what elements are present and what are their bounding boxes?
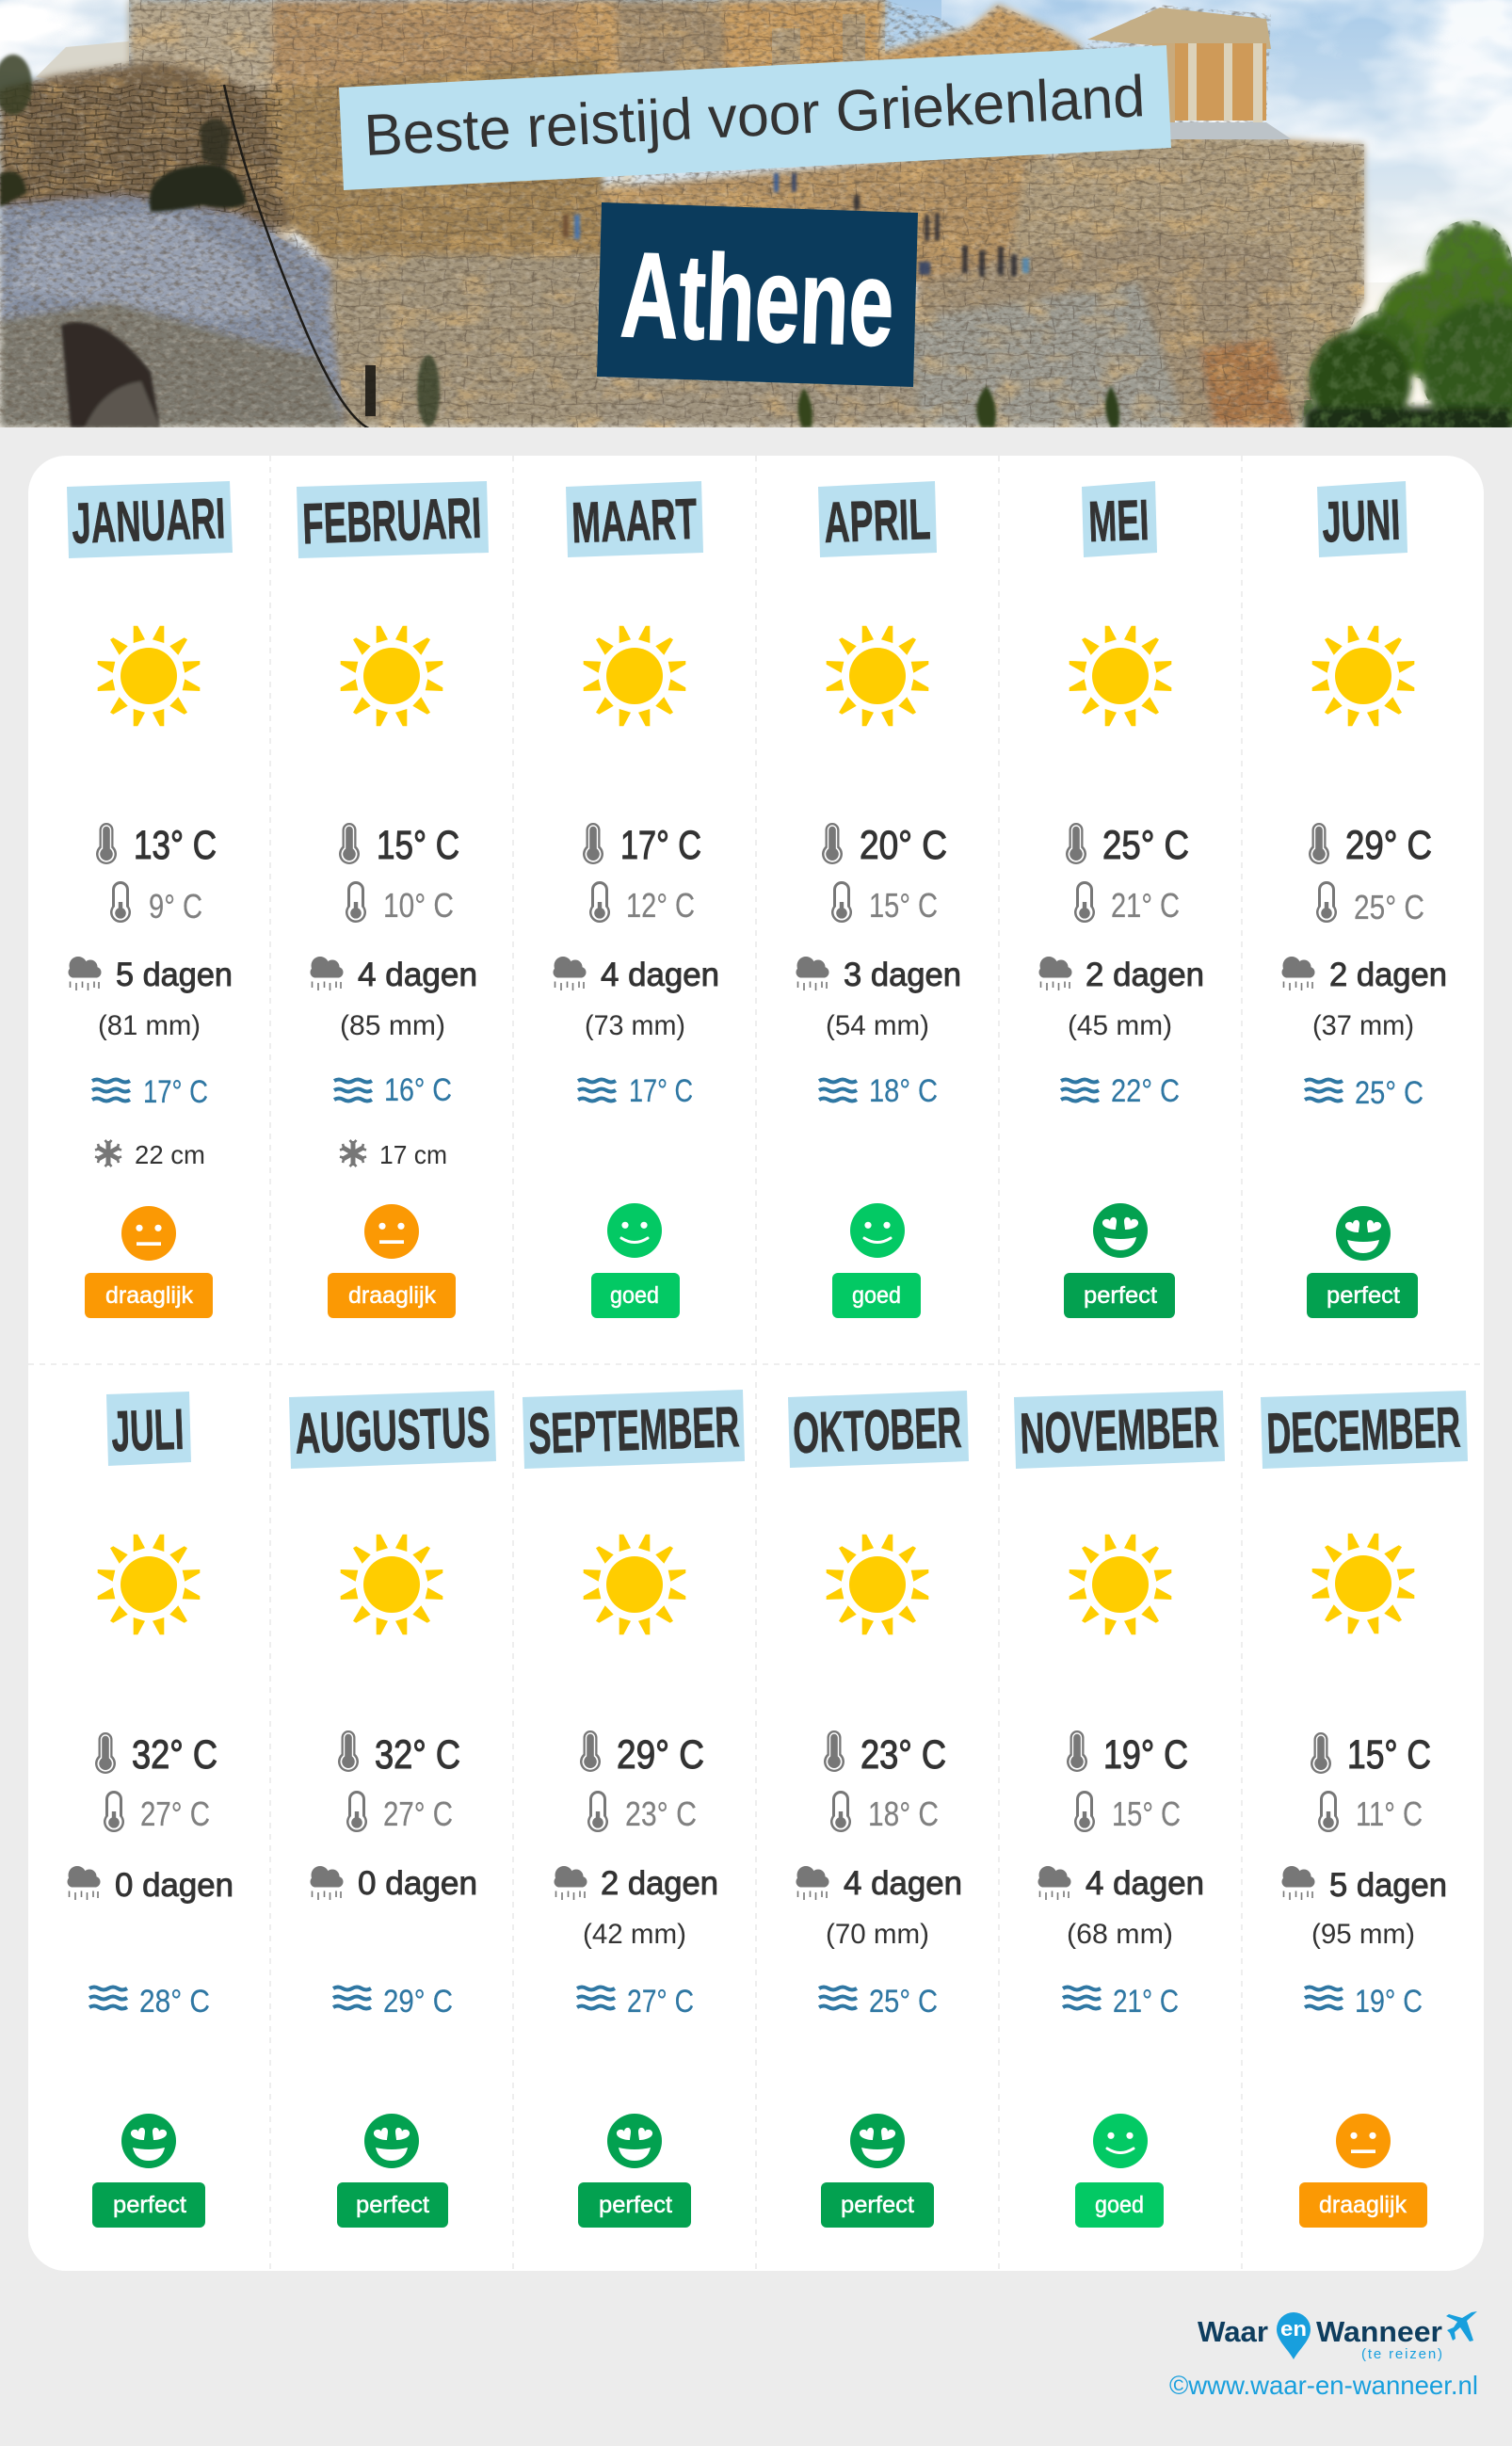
icon: map pin [1277, 2312, 1311, 2359]
rain days: 2 dagen [601, 1865, 718, 1902]
icon: thermometer max [1066, 823, 1086, 864]
month label: MAART [571, 487, 698, 555]
rainfall: (70 mm) [826, 1919, 929, 1950]
icon: happy face [1093, 2114, 1148, 2168]
panel: september [523, 1390, 745, 2228]
min temperature: 11° C [1356, 1794, 1423, 1833]
icon: thermometer min [1074, 1791, 1095, 1832]
logo word: Wanneer: Wanneer [1316, 2315, 1442, 2348]
icon: sea [577, 1987, 615, 2009]
icon: thermometer min [110, 881, 131, 923]
rain days: 5 dagen [116, 957, 233, 993]
rainfall: (68 mm) [1067, 1919, 1173, 1950]
rating badge: perfect [356, 2192, 429, 2218]
rainfall: (95 mm) [1311, 1919, 1415, 1950]
rainfall: (45 mm) [1068, 1010, 1172, 1041]
icon: thermometer min [589, 881, 610, 923]
icon: happy face [607, 1203, 662, 1258]
panel: maart [554, 481, 719, 1318]
max temperature: 29° C [1345, 823, 1432, 868]
icon: snow [340, 1140, 366, 1167]
min temperature: 23° C [625, 1794, 697, 1833]
rating badge: perfect [1084, 1282, 1157, 1309]
icon: sea [92, 1079, 130, 1102]
panel: juli [68, 1392, 233, 2228]
icon: rain [311, 957, 343, 990]
logo tagline: (te reizen) [1361, 2346, 1442, 2362]
min temperature: 25° C [1354, 888, 1424, 926]
panel: mei [1039, 481, 1204, 1318]
icon: airplane [1446, 2311, 1477, 2341]
rating badge [85, 1273, 213, 1318]
min temperature: 27° C [383, 1794, 453, 1833]
icon: neutral face [1336, 2114, 1391, 2168]
icon: happy face [850, 1203, 905, 1258]
icon: rain [1282, 957, 1314, 990]
icon: thermometer max [1311, 1732, 1331, 1774]
max temperature: 32° C [375, 1732, 460, 1778]
icon: thermometer max [339, 823, 360, 864]
month label [289, 1391, 496, 1469]
snow depth: 22 cm [135, 1140, 205, 1169]
icon: thermometer min [587, 1791, 608, 1832]
panel: oktober [788, 1391, 969, 2228]
title text: Athene [619, 227, 896, 372]
icon: sun [584, 626, 685, 726]
icon: sea [819, 1987, 857, 2009]
min temperature: 21° C [1111, 886, 1180, 925]
sea temperature: 29° C [383, 1984, 453, 2020]
panel: april [796, 481, 961, 1318]
rain days: 4 dagen [358, 957, 477, 993]
icon: thermometer max [822, 823, 843, 864]
rain days: 4 dagen [1086, 1865, 1204, 1902]
sea temperature: 17° C [629, 1073, 693, 1109]
sea temperature: 28° C [139, 1984, 210, 2020]
icon: thermometer max [95, 1732, 116, 1774]
icon: sun [827, 626, 928, 726]
rain days: 4 dagen [601, 957, 719, 993]
month label [566, 481, 703, 557]
rating badge [821, 2182, 934, 2228]
panel: februari [297, 481, 489, 1318]
sea temperature: 25° C [1355, 1075, 1424, 1111]
icon: sun [1070, 1535, 1171, 1634]
max temperature: 15° C [377, 823, 459, 868]
rating badge [591, 1273, 680, 1318]
rating badge: perfect [599, 2192, 672, 2218]
icon: thermometer min [830, 1791, 851, 1832]
min temperature: 15° C [1112, 1794, 1181, 1833]
icon: thermometer min [1318, 1791, 1339, 1832]
sea temperature: 19° C [1355, 1984, 1423, 2020]
rain days: 4 dagen [844, 1865, 962, 1902]
rating badge [1064, 1273, 1175, 1318]
month label [297, 481, 489, 558]
rating badge: goed [610, 1282, 659, 1309]
min temperature: 10° C [383, 886, 454, 925]
month label [788, 1391, 969, 1468]
month label: MEI [1087, 488, 1150, 554]
icon: love face [1093, 1203, 1148, 1258]
rainfall: (73 mm) [585, 1010, 685, 1041]
temple of Nike [1087, 8, 1292, 139]
sea temperature: 16° C [384, 1072, 452, 1108]
rating badge: draaglijk [105, 1282, 193, 1309]
icon: sun [1312, 626, 1414, 726]
panel: calendar card [28, 456, 1484, 2271]
icon: thermometer min [346, 881, 366, 923]
panel: juni [1282, 481, 1447, 1318]
icon: rain [68, 957, 102, 990]
month label: JANUARI [71, 486, 226, 555]
min temperature: 27° C [140, 1794, 210, 1833]
max temperature: 23° C [861, 1732, 946, 1778]
month label [1014, 1391, 1225, 1469]
icon: love face [364, 2114, 419, 2168]
icon: thermometer max [824, 1730, 844, 1772]
icon: love face [121, 2114, 176, 2168]
icon: thermometer min [346, 1791, 367, 1832]
snow depth: 17 cm [379, 1140, 447, 1169]
month label: JULI [110, 1397, 185, 1463]
rain days: 3 dagen [844, 957, 961, 993]
rating badge: goed [1095, 2192, 1144, 2218]
rain days: 2 dagen [1329, 957, 1447, 993]
icon: sea [578, 1079, 616, 1102]
icon: rain [554, 1866, 587, 1900]
icon: sun [1070, 626, 1171, 726]
month label: SEPTEMBER [527, 1394, 740, 1466]
icon: thermometer min [1316, 881, 1337, 923]
icon: sea [1063, 1987, 1101, 2009]
panel: januari [67, 481, 233, 1318]
icon: love face [1336, 1206, 1391, 1261]
sea temperature: 21° C [1113, 1984, 1179, 2020]
sea temperature: 17° C [143, 1074, 208, 1110]
month label [67, 481, 233, 558]
icon: rain [68, 1866, 100, 1900]
icon: sea [1305, 1079, 1343, 1102]
icon: sun [98, 1535, 200, 1634]
month label [818, 481, 937, 557]
icon: sun [584, 1535, 685, 1634]
month label [106, 1392, 191, 1466]
icon: map pin: en [1280, 2317, 1307, 2341]
panel: december [1261, 1391, 1468, 2228]
sea temperature: 27° C [627, 1984, 694, 2020]
icon: thermometer max [1067, 1730, 1087, 1772]
icon: sun [827, 1535, 928, 1634]
panel: november [1014, 1391, 1225, 2228]
min temperature: 12° C [626, 886, 695, 925]
max temperature: 25° C [1102, 823, 1189, 868]
icon: sun [341, 1535, 442, 1634]
month label: NOVEMBER [1019, 1394, 1219, 1466]
rating badge [1299, 2182, 1427, 2228]
icon: thermometer max [338, 1730, 359, 1772]
icon: neutral face [121, 1206, 176, 1261]
rating badge [328, 1273, 456, 1318]
icon: sea [1305, 1987, 1343, 2009]
month label [1082, 481, 1157, 557]
rating badge [1307, 1273, 1418, 1318]
rating badge [1075, 2182, 1164, 2228]
rating badge: goed [852, 1282, 901, 1309]
icon: neutral face [364, 1204, 419, 1259]
max temperature: 19° C [1103, 1732, 1188, 1778]
icon: thermometer max [580, 1730, 601, 1772]
subtitle text: Beste reistijd voor Griekenland [362, 64, 1147, 169]
month label [523, 1390, 745, 1469]
icon: rain [311, 1866, 343, 1900]
icon: thermometer max [96, 823, 117, 864]
icon: rain [1039, 957, 1071, 990]
icon: sea [819, 1079, 857, 1102]
max temperature: 32° C [132, 1732, 217, 1778]
rating badge: perfect [1327, 1282, 1400, 1309]
max temperature: 29° C [617, 1732, 704, 1778]
rainfall: (85 mm) [340, 1010, 445, 1041]
logo word: Waar: Waar [1198, 2315, 1268, 2348]
icon: rain [796, 957, 828, 990]
rating badge: perfect [113, 2192, 186, 2218]
rating badge: draaglijk [1319, 2192, 1407, 2218]
panel: augustus [289, 1391, 496, 2228]
rating badge: draaglijk [348, 1282, 436, 1309]
header photo: Acropolis of Athens [0, 0, 1512, 435]
rain days: 2 dagen [1086, 957, 1204, 993]
month label: FEBRUARI [301, 486, 482, 555]
icon: love face [607, 2114, 662, 2168]
month label: APRIL [823, 487, 931, 555]
rain days: 0 dagen [358, 1865, 477, 1902]
rain days: 5 dagen [1329, 1867, 1447, 1904]
sea temperature: 25° C [869, 1984, 938, 2020]
icon: rain [554, 957, 586, 990]
icon: thermometer max [583, 823, 603, 864]
icon: thermometer min [104, 1791, 124, 1832]
rainfall: (81 mm) [98, 1010, 201, 1041]
max temperature: 13° C [134, 823, 217, 868]
rating badge [337, 2182, 448, 2228]
icon: thermometer min [831, 881, 852, 923]
icon: thermometer min [1074, 881, 1095, 923]
min temperature: 15° C [869, 886, 938, 925]
sea temperature: 22° C [1111, 1073, 1180, 1109]
month label [1317, 481, 1407, 557]
rating badge: perfect [841, 2192, 914, 2218]
rating badge [578, 2182, 691, 2228]
icon: sun [1312, 1534, 1414, 1633]
subtitle banner [339, 45, 1171, 190]
rating badge [832, 1273, 921, 1318]
icon: thermometer max [1309, 823, 1329, 864]
tourists on stairs [563, 173, 1029, 277]
rain days: 0 dagen [115, 1867, 233, 1904]
max temperature: 17° C [620, 823, 701, 868]
icon: snow [95, 1140, 121, 1167]
icon: sea [1061, 1079, 1099, 1102]
icon: sun [98, 626, 200, 726]
rainfall: (54 mm) [826, 1010, 929, 1041]
logo: Waar en Wanneer [1198, 2311, 1477, 2362]
min temperature: 18° C [868, 1794, 939, 1833]
rainfall: (37 mm) [1312, 1010, 1414, 1041]
icon: rain [1282, 1866, 1314, 1900]
icon: rain [796, 1866, 828, 1900]
icon: love face [850, 2114, 905, 2168]
month label: AUGUSTUS [294, 1394, 491, 1466]
icon: sea [333, 1987, 371, 2009]
sea temperature: 18° C [869, 1073, 938, 1109]
icon: rain [1037, 1866, 1071, 1900]
icon: sun [341, 626, 442, 726]
min temperature: 9° C [149, 887, 202, 925]
month label: OKTOBER [792, 1395, 962, 1465]
title box: Athene [597, 202, 918, 387]
rating badge [92, 2182, 205, 2228]
icon: sea [334, 1079, 372, 1102]
rainfall: (42 mm) [583, 1919, 686, 1950]
max temperature: 15° C [1347, 1732, 1431, 1778]
icon: sea [89, 1987, 127, 2009]
month label: JUNI [1321, 488, 1401, 554]
max temperature: 20° C [860, 823, 947, 868]
website url: ©www.waar-en-wanneer.nl [1169, 2371, 1478, 2400]
